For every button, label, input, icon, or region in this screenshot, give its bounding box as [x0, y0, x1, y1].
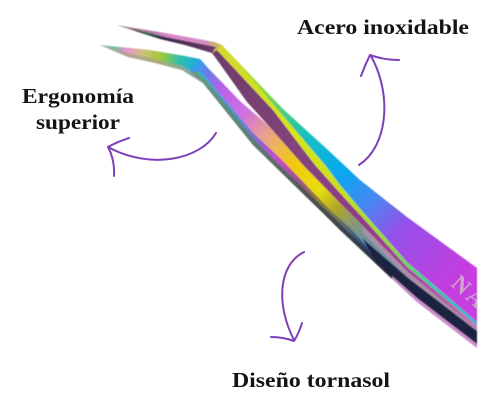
label: Acero inoxidable: Acero inoxidable	[297, 15, 469, 39]
arrow: to Diseño tornasol	[271, 252, 304, 341]
thin pink-grey stripe	[363, 226, 477, 331]
lower prong coloured stripe	[196, 70, 392, 276]
engraved logo: NA	[447, 270, 493, 315]
purple stripe of upper prong	[212, 50, 477, 330]
lower prong dark edge	[190, 71, 395, 279]
lower prong body	[190, 59, 477, 348]
yellow-green stripe of upper prong	[217, 45, 477, 325]
pink bottom edge	[392, 276, 477, 348]
label: Ergonomía superior: superior	[36, 110, 120, 134]
main colour band of upper prong	[222, 45, 477, 322]
upper prong tip	[116, 25, 222, 53]
arrow: to Ergonomía superior	[108, 133, 216, 176]
label: Diseño tornasol: Diseño tornasol	[232, 368, 390, 392]
tweezers illustration	[100, 25, 477, 348]
lower prong tip	[100, 45, 208, 83]
label: Ergonomía superior	[22, 84, 135, 134]
arrow: to Acero inoxidable	[359, 55, 399, 165]
navy wedge	[362, 238, 477, 344]
label: Ergonomía superior: Ergonomía	[22, 84, 135, 108]
